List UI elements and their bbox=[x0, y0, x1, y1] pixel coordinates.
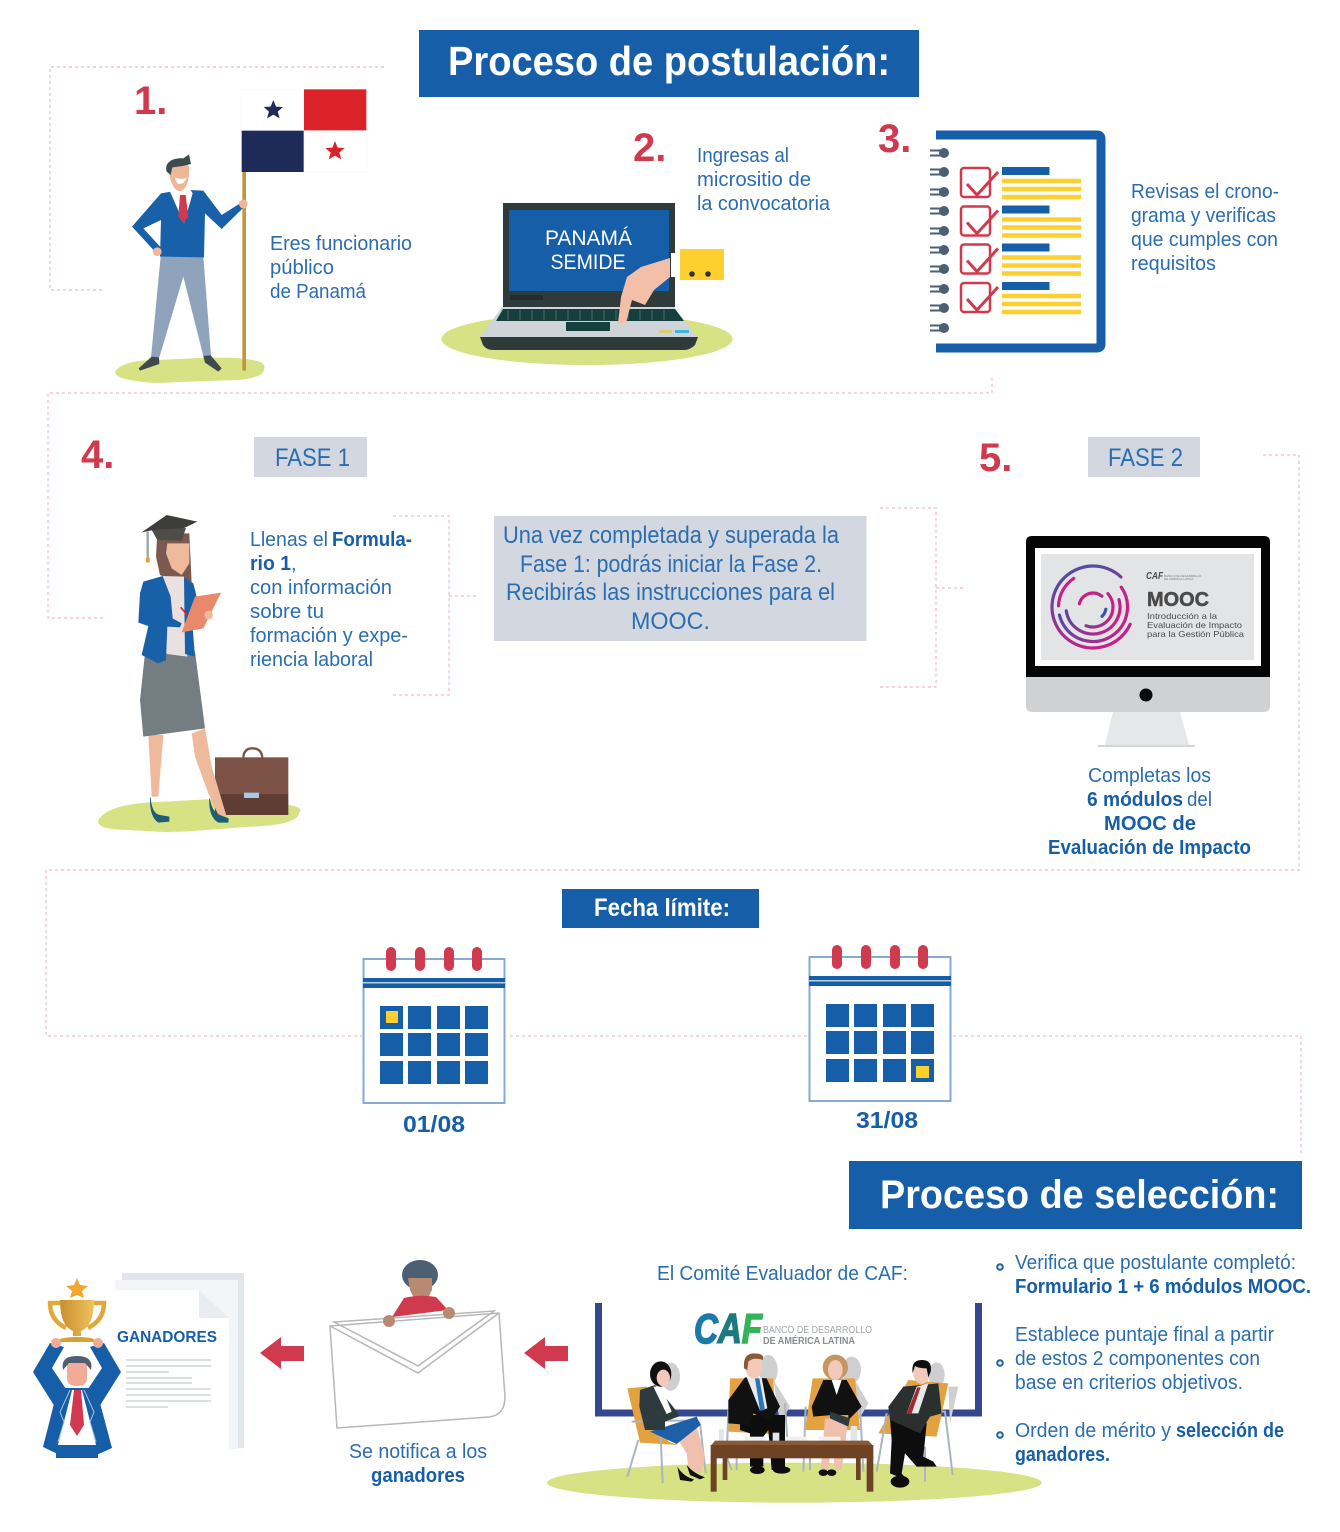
bullet 2: Establece puntaje final a partir bbox=[1015, 1324, 1274, 1346]
screen text: Introducción a la bbox=[1147, 611, 1217, 621]
screen text: CAF bbox=[1146, 571, 1164, 582]
text: Revisas el cronograma: grama y verificas bbox=[1131, 205, 1276, 227]
logo: CAF: BANCO DE DESARROLLO bbox=[763, 1324, 872, 1336]
person 2 bbox=[728, 1353, 790, 1474]
text: Llenas el Formulario 1 bbox=[250, 529, 412, 671]
text: Llenas el Formulario 1: , bbox=[291, 553, 297, 575]
logo: CAF: CAF bbox=[694, 1305, 763, 1352]
bullet 3: selección de bbox=[1176, 1420, 1284, 1442]
icon: graduate woman with briefcase bbox=[98, 515, 300, 832]
text: Se notifica a los ganadores: ganadores bbox=[371, 1465, 465, 1487]
text: Ingresas al micrositio bbox=[697, 145, 831, 215]
screen text: Evaluación de Impacto bbox=[1147, 620, 1242, 630]
text: Revisas el cronograma: que cumples con bbox=[1131, 229, 1278, 251]
heading: Fecha límite bbox=[562, 889, 759, 928]
badge: FASE 2 bbox=[1088, 437, 1200, 477]
logo: CAF bbox=[694, 1305, 872, 1352]
text: Completas los 6 módulos: Completas los bbox=[1088, 765, 1211, 787]
icon: calendar 31/08 bbox=[809, 945, 951, 1101]
chairs bbox=[627, 1378, 948, 1445]
callout: paso de Fase 1 a Fase 2: MOOC. bbox=[631, 608, 710, 635]
panel: winners document bbox=[33, 1273, 244, 1458]
screen text: BANCO DE DESARROLLO bbox=[1164, 574, 1202, 578]
text: Llenas el Formulario 1: rio 1 bbox=[250, 553, 291, 575]
title: Proceso de postulación: Proceso de postulación: bbox=[448, 38, 890, 84]
step number 5: 5. bbox=[979, 436, 1012, 480]
screen text: DE AMÉRICA LATINA bbox=[1164, 576, 1193, 581]
text: Ingresas al micrositio: micrositio de bbox=[697, 169, 811, 191]
text: Se notifica a los ganadores bbox=[349, 1441, 487, 1487]
arrow: to notification bbox=[524, 1337, 568, 1369]
text: Llenas el Formulario 1: con información bbox=[250, 577, 392, 599]
badge: FASE 1 bbox=[254, 437, 367, 477]
step 2 panel bbox=[442, 126, 831, 365]
text: Llenas el Formulario 1: riencia laboral bbox=[250, 649, 373, 671]
icon: calendar 01/08 bbox=[363, 947, 505, 1103]
person 1 bbox=[639, 1361, 705, 1482]
logo: CAF: DE AMÉRICA LATINA bbox=[763, 1334, 855, 1347]
panel: notify winners bbox=[330, 1260, 505, 1487]
text: Completas los 6 módulos: 6 módulos bbox=[1087, 789, 1183, 811]
screen text: PANAMÁ bbox=[545, 227, 632, 250]
text: Llenas el Formulario 1: formación y expe- bbox=[250, 625, 408, 647]
bullet 2: base en criterios objetivos. bbox=[1015, 1372, 1243, 1394]
title: Proceso de selección: Proceso de selección: bbox=[880, 1173, 1279, 1217]
arrow: to winners bbox=[260, 1337, 304, 1369]
list: committee tasks bbox=[997, 1252, 1311, 1466]
text: Llenas el Formulario 1: Formula- bbox=[332, 529, 412, 551]
icon: checklist notebook bbox=[930, 135, 1101, 348]
text: Revisas el cronograma: requisitos bbox=[1131, 253, 1216, 275]
text: Completas los 6 módulos: MOOC de bbox=[1104, 813, 1196, 835]
text: Eres funcionario público de Panamá: público bbox=[270, 257, 334, 279]
screen text bbox=[545, 227, 632, 274]
text: Llenas el Formulario 1: sobre tu bbox=[250, 601, 324, 623]
step number 3: 3. bbox=[878, 117, 911, 161]
text: Completas los 6 módulos: Evaluación de Impacto bbox=[1048, 837, 1251, 859]
title: Proceso de selección bbox=[849, 1161, 1302, 1229]
text: Revisas el cronograma: Revisas el crono- bbox=[1131, 181, 1279, 203]
icon: document pages bbox=[90, 1273, 244, 1449]
bullet 3 bbox=[997, 1420, 1284, 1466]
bullet 2 bbox=[997, 1324, 1274, 1394]
title: Proceso de postulación bbox=[419, 30, 919, 97]
icon: person with envelope bbox=[330, 1260, 505, 1428]
icon: man with Panama flag bbox=[115, 89, 366, 383]
screen text: MOOC bbox=[1147, 589, 1209, 611]
text: Eres funcionario público de Panamá: de Panamá bbox=[270, 281, 367, 303]
bullet 3: ganadores. bbox=[1015, 1444, 1110, 1466]
screen text bbox=[1146, 571, 1244, 639]
step 5 panel bbox=[979, 436, 1270, 859]
callout: paso de Fase 1 a Fase 2: Fase 1: podrás iniciar la Fase 2. bbox=[520, 551, 822, 578]
bullet 1: Formulario 1 + 6 módulos MOOC. bbox=[1015, 1276, 1311, 1298]
text: El Comité Evaluador de CAF: El Comité Evaluador de CAF: bbox=[657, 1263, 908, 1285]
date: 31/08: 31/08 bbox=[856, 1107, 918, 1133]
heading: Fecha límite: Fecha límite: bbox=[594, 894, 730, 922]
badge: FASE 1: FASE 1 bbox=[275, 444, 350, 472]
date: 01/08: 01/08 bbox=[403, 1111, 465, 1137]
step 4 panel bbox=[81, 433, 412, 832]
bullet 2: de estos 2 componentes con bbox=[1015, 1348, 1260, 1370]
badge: FASE 2: FASE 2 bbox=[1108, 444, 1183, 472]
bullet 3: Orden de mérito y bbox=[1015, 1420, 1171, 1442]
text: Se notifica a los ganadores: Se notifica a los bbox=[349, 1441, 487, 1463]
screen text: SEMIDE bbox=[550, 251, 626, 274]
callout: paso de Fase 1 a Fase 2: Una vez completada y superada la bbox=[503, 522, 840, 549]
illustration: panel of four evaluators bbox=[547, 1353, 1042, 1503]
text: GANADORES: GANADORES bbox=[117, 1329, 217, 1346]
text: Ingresas al micrositio: la convocatoria bbox=[697, 193, 831, 215]
icon: winner with trophy bbox=[33, 1278, 121, 1458]
bullet 1: Verifica que postulante completó: bbox=[1015, 1252, 1296, 1274]
text: Revisas el cronograma bbox=[1131, 181, 1279, 275]
panel: committee bbox=[547, 1252, 1311, 1503]
callout: paso de Fase 1 a Fase 2: Recibirás las instrucciones para el bbox=[506, 579, 835, 606]
text: Llenas el Formulario 1: Llenas el bbox=[250, 529, 328, 551]
table bbox=[711, 1426, 873, 1492]
step number 4: 4. bbox=[81, 433, 114, 477]
step 3 panel bbox=[878, 117, 1279, 348]
person 3 bbox=[812, 1355, 862, 1476]
callout: paso de Fase 1 a Fase 2 bbox=[494, 516, 866, 641]
text: Ingresas al micrositio: Ingresas al bbox=[697, 145, 789, 167]
text: Completas los 6 módulos bbox=[1048, 765, 1251, 859]
text: Eres funcionario público de Panamá: Eres funcionario bbox=[270, 233, 412, 255]
step number 2: 2. bbox=[633, 126, 666, 170]
bullet 1 bbox=[997, 1252, 1311, 1298]
icon: laptop with hand bbox=[442, 203, 732, 365]
screen text: para la Gestión Pública bbox=[1147, 629, 1244, 639]
person shadows bbox=[661, 1355, 958, 1423]
frame bbox=[598, 1303, 978, 1413]
text: Completas los 6 módulos: del bbox=[1187, 789, 1212, 811]
person 4 bbox=[888, 1360, 942, 1488]
text: Eres funcionario público de Panamá bbox=[270, 233, 412, 303]
step 1 panel bbox=[115, 79, 412, 383]
step number 1: 1. bbox=[134, 79, 167, 123]
icon: monitor with MOOC screen bbox=[1026, 536, 1270, 747]
